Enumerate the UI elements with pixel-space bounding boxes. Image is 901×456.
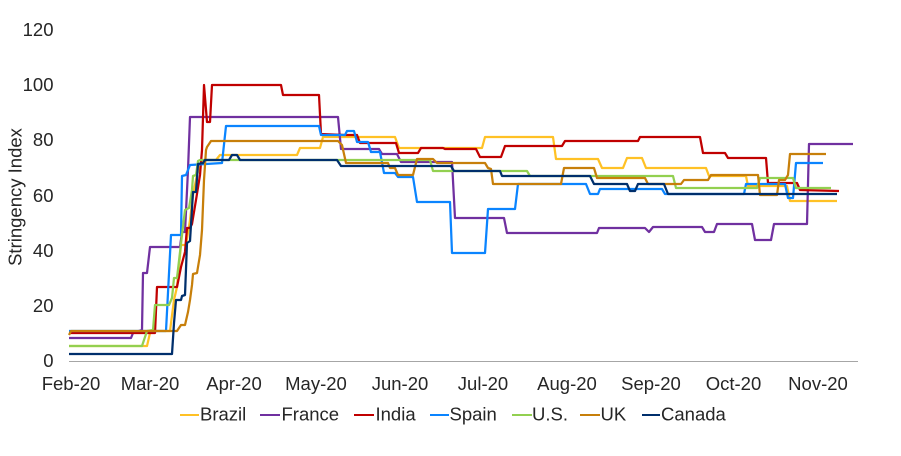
x axis tick labels: Apr-20 xyxy=(206,373,262,394)
legend: Canada xyxy=(661,404,727,424)
legend: U.S. xyxy=(532,404,568,424)
series: U.S. xyxy=(69,160,831,346)
y axis tick labels: 20 xyxy=(33,295,54,316)
x axis tick labels xyxy=(42,373,848,394)
series: UK xyxy=(69,141,826,335)
x axis tick labels: Jul-20 xyxy=(458,373,508,394)
series: Canada xyxy=(69,155,837,354)
y axis tick labels: 100 xyxy=(23,74,54,95)
x axis tick labels: Mar-20 xyxy=(121,373,179,394)
legend: France xyxy=(282,404,339,424)
x axis tick labels: Oct-20 xyxy=(706,373,761,394)
y axis tick labels: 0 xyxy=(43,350,54,371)
x axis tick labels: Aug-20 xyxy=(537,373,597,394)
legend: Brazil xyxy=(200,404,246,424)
x axis tick labels: Jun-20 xyxy=(372,373,428,394)
series: Spain xyxy=(69,126,823,331)
y axis tick labels: 80 xyxy=(33,129,54,150)
y axis tick labels: 60 xyxy=(33,185,54,206)
series: France xyxy=(69,117,853,338)
legend: UK xyxy=(600,404,627,424)
series: India xyxy=(69,85,839,333)
y axis title: Stringency Index xyxy=(4,127,26,266)
legend xyxy=(180,404,727,424)
y axis tick labels: 40 xyxy=(33,240,54,261)
legend: Spain xyxy=(450,404,497,424)
x axis tick labels: Sep-20 xyxy=(621,373,681,394)
y axis tick labels: 120 xyxy=(23,19,54,40)
x axis tick labels: May-20 xyxy=(285,373,347,394)
series: Brazil xyxy=(69,137,837,346)
y axis tick labels xyxy=(23,19,54,371)
x axis tick labels: Feb-20 xyxy=(42,373,100,394)
x axis tick labels: Nov-20 xyxy=(788,373,848,394)
x axis line xyxy=(69,360,858,362)
legend: India xyxy=(376,404,416,424)
